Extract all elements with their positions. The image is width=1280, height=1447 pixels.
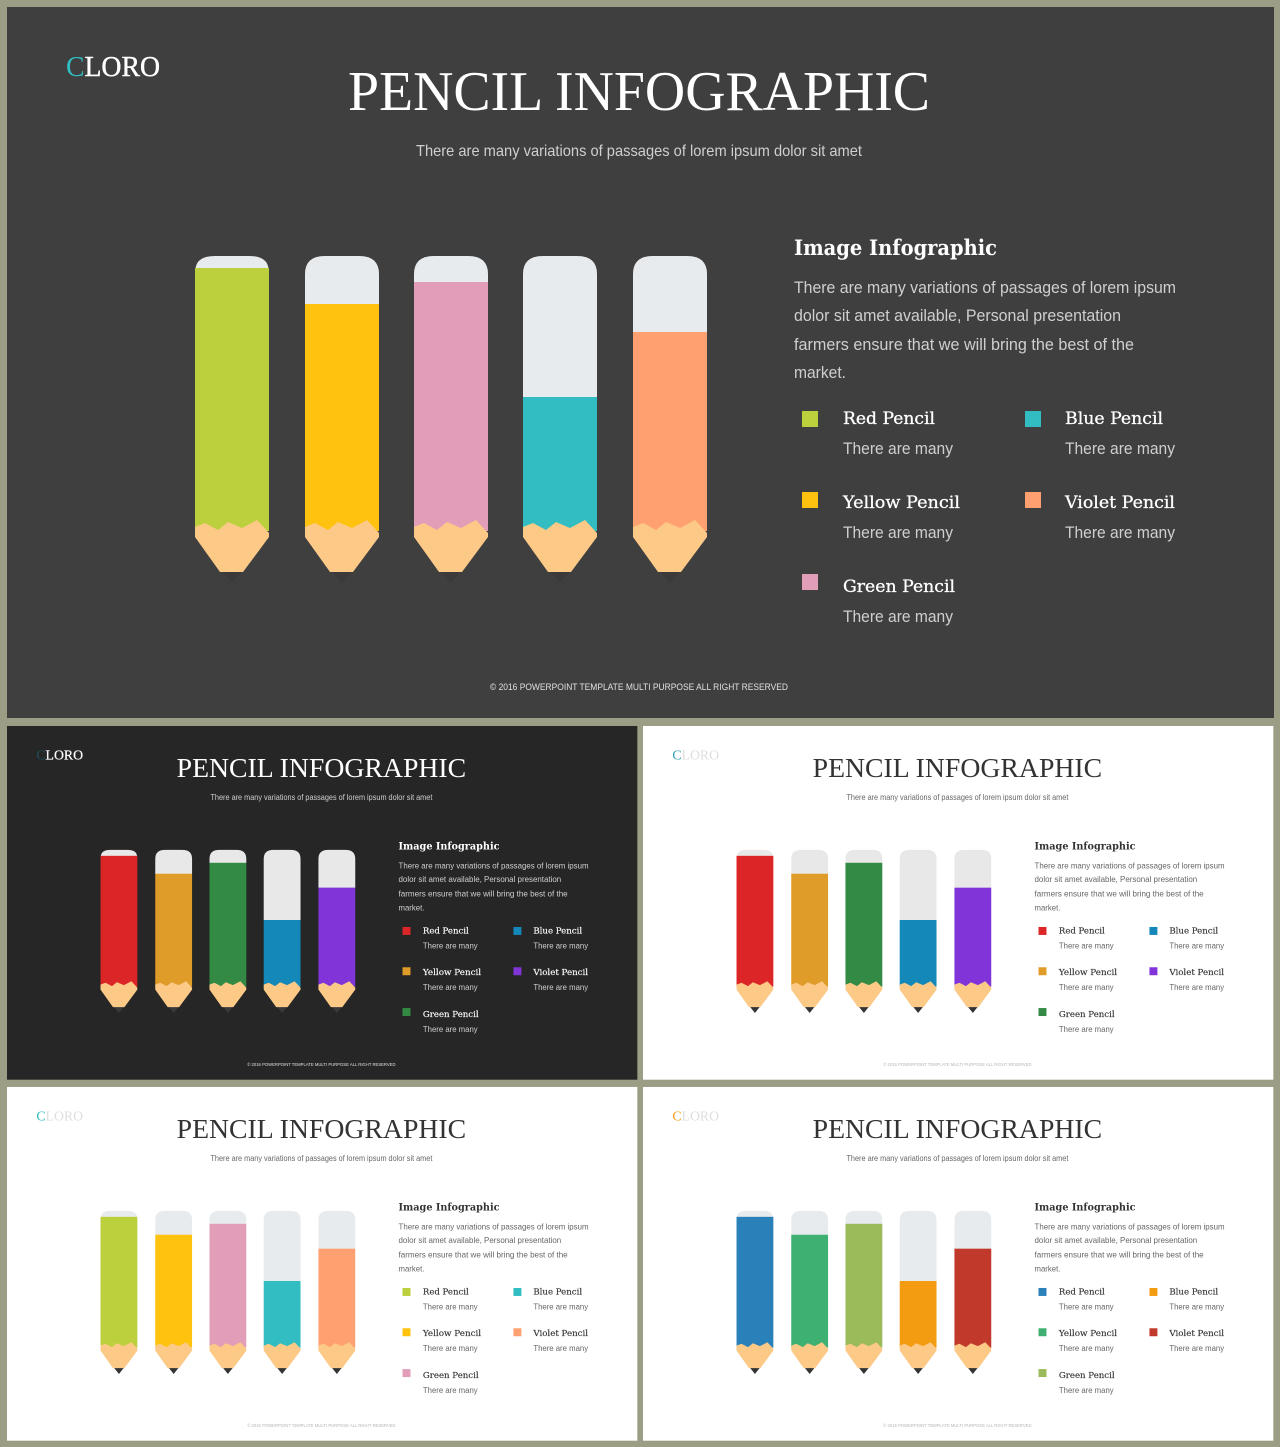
pencil 2 <box>791 850 828 1013</box>
pencil 3 <box>414 256 488 583</box>
title: PENCIL INFOGRAPHIC <box>348 61 930 123</box>
pencil 3 <box>845 850 882 1013</box>
legend item: violet pencil: There are many <box>533 982 589 992</box>
legend item: blue pencil: There are many <box>1065 439 1175 458</box>
legend <box>403 1286 589 1395</box>
logo: CLORO <box>36 748 83 763</box>
pencil 3 <box>209 1211 246 1374</box>
panel: small white slide, flat colours <box>643 1087 1273 1441</box>
pencil 5 <box>318 1211 355 1374</box>
logo: CLORO <box>672 1109 719 1124</box>
pencil 2 <box>305 256 379 583</box>
legend item: red pencil: Red Pencil <box>1059 1286 1105 1296</box>
text block: market. <box>399 903 424 913</box>
text block: dolor sit amet available, Personal presentation <box>399 1235 561 1245</box>
text block: dolor sit amet available, Personal presentation <box>399 874 561 884</box>
legend item: violet pencil <box>513 967 589 992</box>
heading: Image Infographic <box>794 235 997 260</box>
footer: © 2016 POWERPOINT TEMPLATE MULTI PURPOSE ALL RIGHT RESERVED <box>490 682 788 693</box>
legend item: yellow pencil <box>1039 967 1117 992</box>
legend item: blue pencil: Blue Pencil <box>1169 925 1218 935</box>
legend <box>1039 1286 1225 1395</box>
legend item: yellow pencil: Yellow Pencil <box>1058 967 1117 977</box>
legend item: blue pencil: There are many <box>533 1301 589 1311</box>
pencil 1 <box>737 1211 773 1374</box>
legend item: green pencil <box>403 1008 479 1034</box>
legend item: yellow pencil: There are many <box>423 1343 478 1353</box>
text block <box>399 1221 589 1274</box>
text block: market. <box>399 1264 424 1274</box>
pencil 5 <box>633 256 707 583</box>
subtitle: There are many variations of passages of lorem ipsum dolor sit amet <box>846 1154 1069 1163</box>
legend item: red pencil: There are many <box>843 439 953 458</box>
pencil 4 <box>264 1211 301 1374</box>
legend item: yellow pencil: Yellow Pencil <box>842 493 960 513</box>
legend item: yellow pencil: There are many <box>843 523 953 542</box>
pencil 2 <box>791 1211 828 1374</box>
heading: Image Infographic <box>1035 1201 1136 1213</box>
text block: farmers ensure that we will bring the best of the <box>399 1250 568 1260</box>
legend item: green pencil <box>1039 1008 1115 1034</box>
legend item: violet pencil: Violet Pencil <box>1064 493 1175 513</box>
footer: © 2016 POWERPOINT TEMPLATE MULTI PURPOSE ALL RIGHT RESERVED <box>247 1061 396 1068</box>
legend item: green pencil: There are many <box>1059 1024 1114 1034</box>
legend <box>403 925 589 1034</box>
legend item: blue pencil: There are many <box>1169 1301 1225 1311</box>
legend item: blue pencil: Blue Pencil <box>1065 409 1163 429</box>
text block: farmers ensure that we will bring the best of the <box>1035 889 1204 899</box>
title: PENCIL INFOGRAPHIC <box>813 753 1102 784</box>
text block: There are many variations of passages of lorem ipsum <box>399 1221 589 1231</box>
pencil 4 <box>523 256 597 583</box>
text block: farmers ensure that we will bring the best of the <box>1035 1250 1204 1260</box>
legend item: red pencil: There are many <box>423 940 478 950</box>
legend item: blue pencil <box>1149 925 1225 950</box>
pencil 3 <box>845 1211 882 1374</box>
footer: © 2016 POWERPOINT TEMPLATE MULTI PURPOSE ALL RIGHT RESERVED <box>247 1422 396 1429</box>
legend item: yellow pencil: There are many <box>423 982 478 992</box>
subtitle: There are many variations of passages of lorem ipsum dolor sit amet <box>846 793 1069 802</box>
legend item: green pencil: Green Pencil <box>423 1370 479 1380</box>
text block <box>794 278 1176 382</box>
legend item: blue pencil: Blue Pencil <box>1169 1286 1218 1296</box>
heading: Image Infographic <box>399 840 500 852</box>
text block: dolor sit amet available, Personal presentation <box>1035 874 1197 884</box>
subtitle: There are many variations of passages of lorem ipsum dolor sit amet <box>416 143 863 160</box>
legend item: blue pencil <box>513 925 589 950</box>
legend item: blue pencil <box>513 1286 589 1311</box>
panel: small black slide <box>7 726 637 1080</box>
logo: CLORO <box>36 1109 83 1124</box>
legend item: red pencil: Red Pencil <box>423 1286 469 1296</box>
text block: dolor sit amet available, Personal presentation <box>1035 1235 1197 1245</box>
legend item: blue pencil <box>1025 409 1175 458</box>
legend item: green pencil: There are many <box>423 1024 478 1034</box>
text block: market. <box>1035 1264 1060 1274</box>
legend item: violet pencil <box>1149 967 1225 992</box>
footer: © 2016 POWERPOINT TEMPLATE MULTI PURPOSE ALL RIGHT RESERVED <box>883 1422 1032 1429</box>
legend item: yellow pencil <box>1039 1328 1117 1353</box>
pencil 4 <box>264 850 301 1013</box>
legend item: red pencil <box>403 925 478 950</box>
pencil 1 <box>737 850 773 1013</box>
pencil 5 <box>318 850 355 1013</box>
text block: There are many variations of passages of lorem ipsum <box>1035 860 1225 870</box>
subtitle: There are many variations of passages of lorem ipsum dolor sit amet <box>210 1154 433 1163</box>
legend item: blue pencil: There are many <box>533 940 589 950</box>
panel: main dark slide <box>7 7 1274 718</box>
text block <box>1035 860 1225 913</box>
legend item: red pencil <box>1039 1286 1114 1311</box>
chart: pencils <box>101 1211 355 1374</box>
legend item: yellow pencil: Yellow Pencil <box>422 1328 481 1338</box>
legend item: red pencil <box>403 1286 478 1311</box>
legend item: yellow pencil <box>403 967 481 992</box>
legend item: blue pencil: There are many <box>1169 940 1225 950</box>
legend item: violet pencil: There are many <box>1169 1343 1225 1353</box>
chart: pencils <box>737 1211 991 1374</box>
legend item: violet pencil: Violet Pencil <box>1168 967 1224 977</box>
text block: farmers ensure that we will bring the best of the <box>399 889 568 899</box>
panel: small white slide, pastel colours <box>7 1087 637 1441</box>
legend item: green pencil: Green Pencil <box>1059 1370 1115 1380</box>
legend item: green pencil: There are many <box>843 607 953 626</box>
text block: There are many variations of passages of lorem ipsum <box>1035 1221 1225 1231</box>
legend item: yellow pencil: Yellow Pencil <box>1058 1328 1117 1338</box>
logo: CLORO <box>672 748 719 763</box>
panel: small white slide, primary colours <box>643 726 1273 1080</box>
legend item: violet pencil <box>513 1328 589 1353</box>
text block: dolor sit amet available, Personal presentation <box>794 306 1121 325</box>
chart: pencils <box>195 256 707 583</box>
legend item: green pencil <box>802 574 955 626</box>
legend item: green pencil: Green Pencil <box>843 577 955 597</box>
legend item: red pencil <box>1039 925 1114 950</box>
text block: market. <box>1035 903 1060 913</box>
title: PENCIL INFOGRAPHIC <box>813 1114 1102 1145</box>
legend item: yellow pencil <box>802 492 960 542</box>
pencil 1 <box>101 1211 137 1374</box>
legend item: green pencil: Green Pencil <box>423 1009 479 1019</box>
title: PENCIL INFOGRAPHIC <box>177 753 466 784</box>
pencil 1 <box>195 256 269 583</box>
pencil 1 <box>101 850 137 1013</box>
legend item: red pencil <box>802 409 953 458</box>
legend item: yellow pencil: There are many <box>1059 1343 1114 1353</box>
legend item: violet pencil: Violet Pencil <box>532 967 588 977</box>
heading: Image Infographic <box>399 1201 500 1213</box>
pencil 4 <box>900 850 937 1013</box>
legend item: red pencil: There are many <box>1059 1301 1114 1311</box>
legend item: green pencil: There are many <box>423 1385 478 1395</box>
subtitle: There are many variations of passages of lorem ipsum dolor sit amet <box>210 793 433 802</box>
legend <box>1039 925 1225 1034</box>
legend item: violet pencil: Violet Pencil <box>1168 1328 1224 1338</box>
text block: farmers ensure that we will bring the best of the <box>794 335 1134 354</box>
legend item: blue pencil <box>1149 1286 1225 1311</box>
legend item: blue pencil: Blue Pencil <box>533 925 582 935</box>
logo: CLORO <box>66 52 160 83</box>
pencil 3 <box>209 850 246 1013</box>
legend item: violet pencil <box>1149 1328 1225 1353</box>
legend item: yellow pencil: There are many <box>1059 982 1114 992</box>
chart: pencils <box>737 850 991 1013</box>
legend item: yellow pencil <box>403 1328 481 1353</box>
heading: Image Infographic <box>1035 840 1136 852</box>
legend item: red pencil: There are many <box>423 1301 478 1311</box>
legend item: red pencil: Red Pencil <box>843 409 935 429</box>
legend item: red pencil: Red Pencil <box>423 925 469 935</box>
legend item: green pencil: Green Pencil <box>1059 1009 1115 1019</box>
legend item: violet pencil: There are many <box>533 1343 589 1353</box>
legend item: violet pencil <box>1025 492 1175 542</box>
pencil 2 <box>155 1211 192 1374</box>
footer: © 2016 POWERPOINT TEMPLATE MULTI PURPOSE ALL RIGHT RESERVED <box>883 1061 1032 1068</box>
text block: There are many variations of passages of lorem ipsum <box>399 860 589 870</box>
chart: pencils <box>101 850 355 1013</box>
title: PENCIL INFOGRAPHIC <box>177 1114 466 1145</box>
text block: There are many variations of passages of lorem ipsum <box>794 278 1176 297</box>
legend item: green pencil <box>403 1369 479 1395</box>
legend item: yellow pencil: Yellow Pencil <box>422 967 481 977</box>
legend item: red pencil: There are many <box>1059 940 1114 950</box>
legend item: violet pencil: There are many <box>1065 523 1175 542</box>
text block <box>1035 1221 1225 1274</box>
text block: market. <box>794 363 846 382</box>
pencil 2 <box>155 850 192 1013</box>
legend <box>802 409 1175 626</box>
legend item: violet pencil: There are many <box>1169 982 1225 992</box>
legend item: green pencil: There are many <box>1059 1385 1114 1395</box>
pencil 5 <box>954 1211 991 1374</box>
legend item: red pencil: Red Pencil <box>1059 925 1105 935</box>
legend item: green pencil <box>1039 1369 1115 1395</box>
pencil 5 <box>954 850 991 1013</box>
text block <box>399 860 589 913</box>
legend item: blue pencil: Blue Pencil <box>533 1286 582 1296</box>
pencil 4 <box>900 1211 937 1374</box>
legend item: violet pencil: Violet Pencil <box>532 1328 588 1338</box>
